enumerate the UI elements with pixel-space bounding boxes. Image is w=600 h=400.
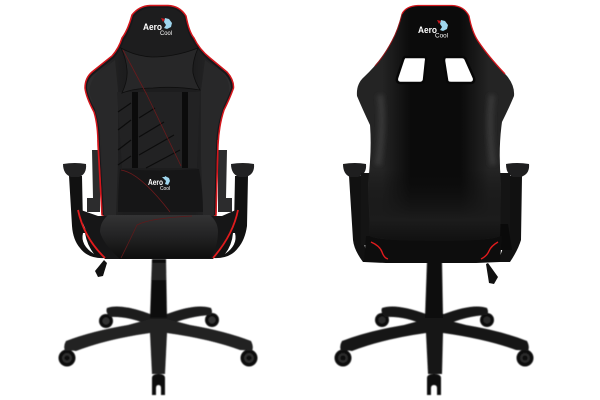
lower back texture sheen	[368, 170, 501, 241]
rear base legs	[106, 306, 212, 325]
seat red stitching	[121, 216, 192, 258]
logo word Aero: Aero	[148, 178, 163, 187]
seat cushion	[100, 215, 218, 259]
gas lift column	[150, 259, 167, 318]
right red piping	[213, 210, 238, 258]
right armrest	[498, 163, 529, 262]
armrest pad	[63, 163, 86, 177]
backrest shell with red upper edge	[357, 6, 514, 241]
front right caster	[240, 350, 258, 366]
white slivers beside seat	[98, 214, 222, 218]
front left caster	[334, 350, 352, 366]
front base legs	[64, 319, 253, 374]
backrest with red piping	[85, 6, 234, 216]
back chair	[334, 6, 534, 395]
centre back panel	[117, 92, 200, 168]
seat side bolsters with red piping	[78, 209, 238, 259]
right armrest	[213, 163, 254, 258]
back chair base and casters	[334, 262, 534, 395]
front left caster	[58, 350, 76, 366]
lumbar red stitching	[121, 170, 170, 212]
front chair base and casters	[58, 259, 258, 395]
left red piping	[78, 210, 105, 258]
pillow diagonal stitching	[123, 50, 147, 95]
logo mark	[440, 20, 448, 31]
red diagonal stitching	[147, 95, 181, 166]
left armrest	[63, 163, 105, 258]
tilt lever	[95, 260, 107, 277]
logo word Cool: Cool	[435, 34, 448, 40]
red left piping	[375, 14, 402, 66]
front chair	[58, 6, 258, 395]
logo word Aero: Aero	[418, 25, 437, 36]
back logo	[418, 20, 448, 40]
logo mark	[162, 176, 170, 185]
recline mechanism	[361, 173, 510, 245]
armrest pad	[506, 163, 529, 177]
rear left caster	[375, 313, 389, 327]
armrest stem	[69, 176, 105, 258]
lumbar pillow	[118, 169, 203, 212]
armrest stem	[498, 176, 522, 262]
armrest stem	[213, 176, 248, 258]
logo word Aero: Aero	[143, 22, 162, 33]
front centre caster	[152, 374, 165, 395]
left red accent	[371, 242, 388, 259]
left white crescent gap	[82, 233, 94, 254]
side bolster shading	[90, 60, 229, 216]
vertical straps	[132, 92, 188, 168]
red top piping	[402, 6, 505, 74]
left headrest slot	[397, 57, 426, 83]
lumbar logo	[148, 176, 170, 192]
column sleeve	[152, 263, 166, 280]
left armrest	[343, 163, 368, 262]
backrest leather panel	[87, 8, 231, 216]
logo red accent	[161, 18, 165, 22]
diagonal quilting lines	[118, 103, 180, 168]
front base legs	[340, 319, 529, 374]
tilt lever	[486, 263, 498, 284]
logo red accent	[437, 20, 441, 24]
right red accent	[481, 242, 498, 259]
right white crescent gap	[225, 233, 236, 254]
head pillow	[121, 48, 200, 93]
armrest pad	[231, 163, 254, 177]
inner red edge lines	[98, 140, 218, 213]
right headrest slot	[444, 57, 474, 83]
logo mark	[164, 18, 172, 29]
logo word Cool: Cool	[160, 31, 172, 37]
rear base legs	[381, 306, 488, 325]
head logo	[143, 18, 172, 37]
front right caster	[516, 350, 534, 366]
rear left caster	[99, 314, 113, 328]
front centre caster	[427, 374, 441, 395]
side strips behind backrest	[87, 150, 232, 212]
rear right caster	[480, 313, 494, 327]
armrest pad	[343, 163, 366, 177]
seat pan underside	[364, 236, 502, 263]
side sheen	[378, 95, 493, 165]
armrest stem	[349, 176, 368, 262]
logo word Cool: Cool	[160, 186, 170, 192]
gas lift column	[425, 262, 443, 318]
rear right caster	[205, 313, 219, 327]
